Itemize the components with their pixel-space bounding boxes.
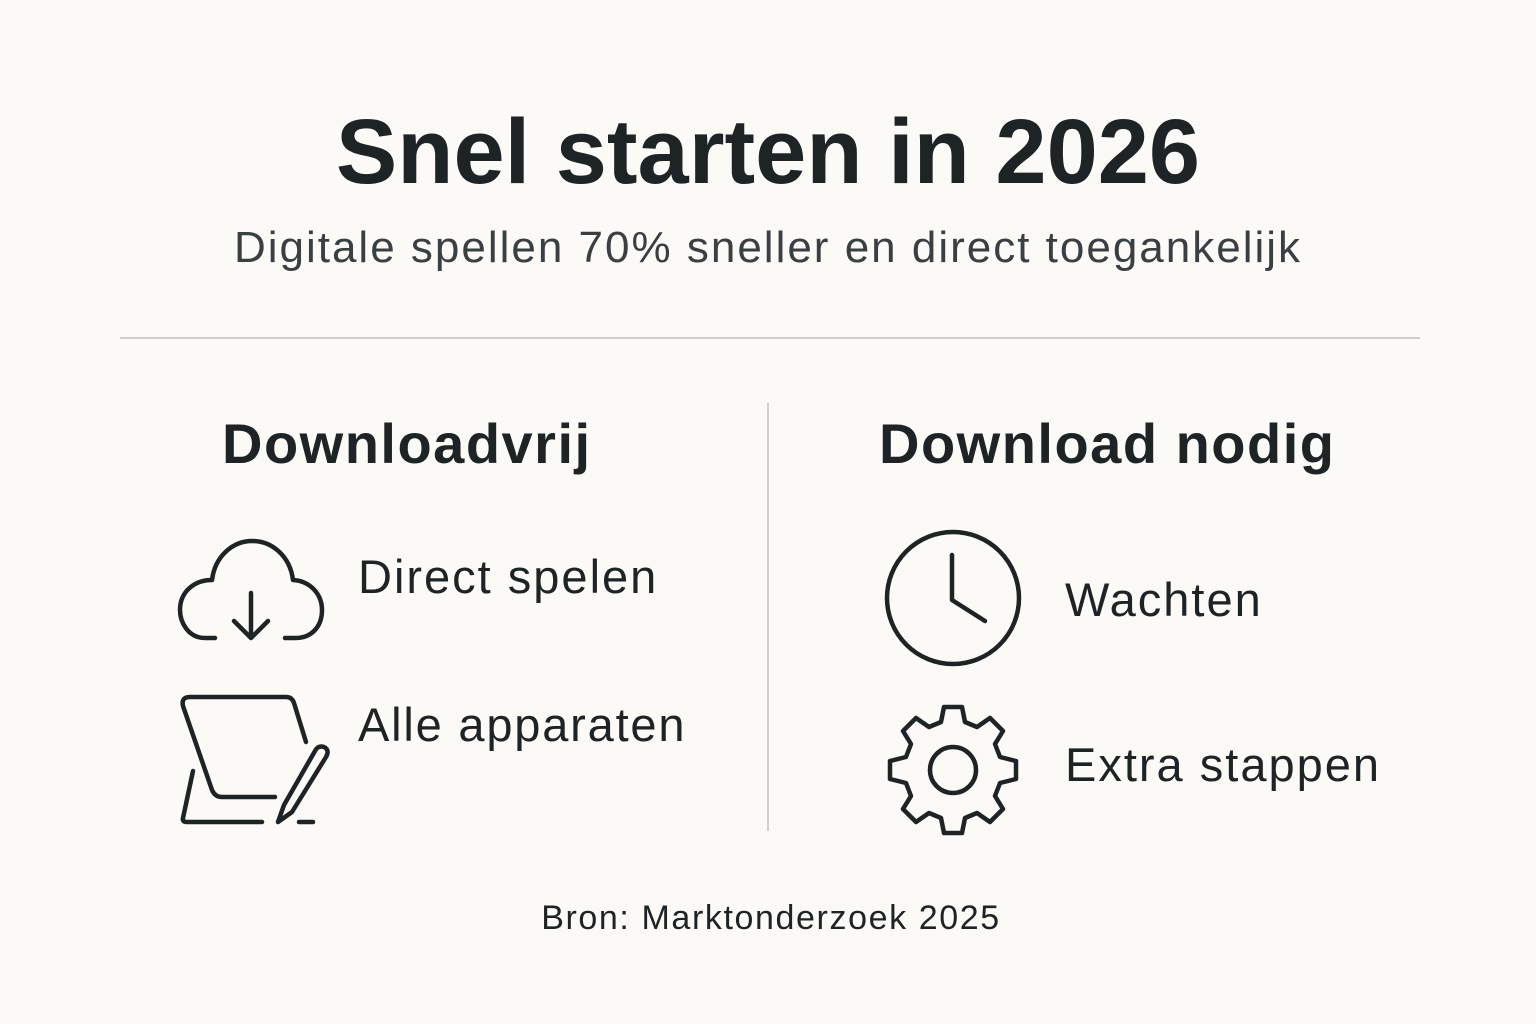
item: Wachten: Wachten	[1065, 573, 1263, 626]
item: Extra stappen: Extra stappen	[1065, 738, 1381, 791]
heading: Download nodig: Download nodig	[879, 412, 1335, 475]
heading: Downloadvrij: Downloadvrij	[222, 412, 592, 475]
footer source: Bron: Marktonderzoek 2025	[541, 899, 1001, 937]
item: Alle apparaten: Alle apparaten	[358, 698, 686, 751]
subtitle: Digitale spellen 70% sneller en direct toegankelijk	[234, 223, 1302, 272]
title: Snel starten in 2026	[336, 101, 1200, 203]
item: Direct spelen: Direct spelen	[358, 550, 658, 603]
